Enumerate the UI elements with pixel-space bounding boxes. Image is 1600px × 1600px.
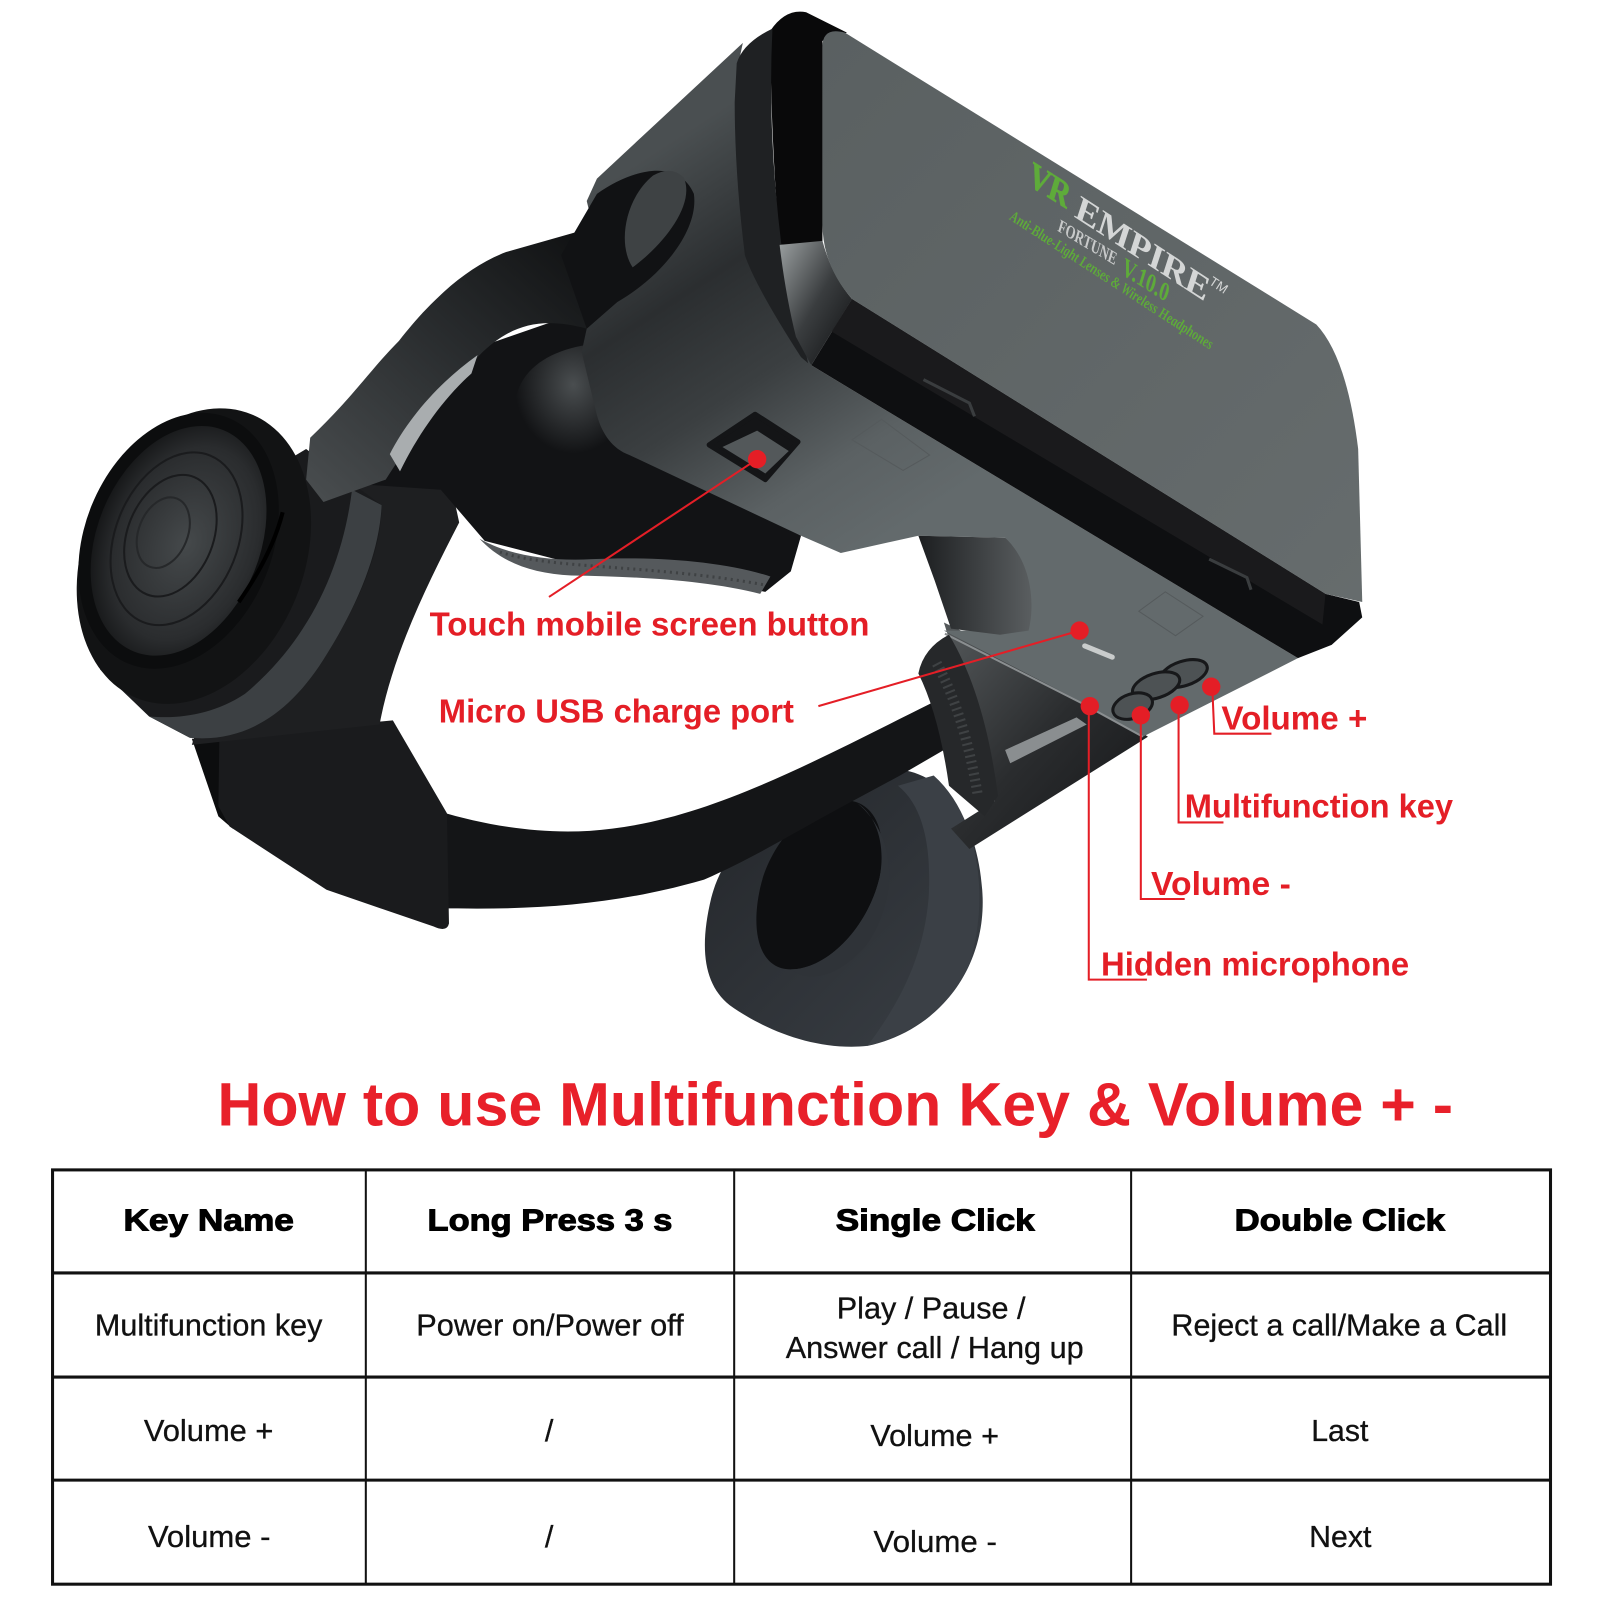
left earcup disc <box>42 383 315 699</box>
row: volume minus: Volume - <box>148 1520 270 1554</box>
callout: multifunction key: Multifunction key <box>1185 788 1453 825</box>
mesh side pad <box>918 635 998 816</box>
back head strap <box>439 702 944 909</box>
inner handle under body <box>918 536 1032 635</box>
table header row: Long Press 3 s <box>428 1204 672 1238</box>
callout: volume plus: Volume + <box>1221 701 1367 738</box>
row: multifunction key: Power on/Power off <box>416 1309 684 1343</box>
foam interior <box>367 301 801 592</box>
row: volume minus: Volume - <box>873 1525 997 1559</box>
row: volume plus: Last <box>1311 1414 1369 1448</box>
brand logo on headset: VR <box>1024 154 1076 217</box>
side buttons <box>1109 654 1211 724</box>
brand logo on headset <box>1007 154 1231 354</box>
strap buckle block <box>218 720 449 929</box>
ear arm clip <box>561 171 694 329</box>
left bezel strip <box>735 29 808 363</box>
row: volume plus: Volume + <box>870 1419 999 1453</box>
row: multifunction key: Multifunction key <box>95 1309 323 1343</box>
title: How to use Multifunction Key & Volume + - <box>217 1071 1453 1139</box>
callout: micro USB charge port: Micro USB charge port <box>439 693 794 730</box>
brand logo on headset: V.10.0 <box>1119 253 1173 308</box>
row: volume plus <box>144 1414 1369 1453</box>
headband arm <box>306 227 617 502</box>
callout: hidden microphone <box>1081 697 1409 984</box>
dark area beneath plate and lower strap <box>944 622 1148 849</box>
callout: hidden microphone: Hidden microphone <box>1101 947 1409 984</box>
side strap under left earcup <box>192 429 459 745</box>
strap buckle left edge <box>192 737 233 829</box>
earcup slot <box>239 512 283 602</box>
callout: touch mobile screen button: Touch mobile screen button <box>430 607 869 644</box>
row: volume minus <box>148 1520 1372 1559</box>
brand logo on headset: Anti-Blue-Light Lenses & Wireless Headphones <box>1007 207 1215 354</box>
callout: volume plus <box>1202 678 1367 738</box>
row: multifunction key: Answer call / Hang up <box>786 1331 1084 1365</box>
callout: multifunction key <box>1170 696 1453 825</box>
callout: touch mobile screen button <box>430 450 869 644</box>
row: volume plus: Volume + <box>144 1414 273 1448</box>
plate lower highlight edge <box>945 634 1143 737</box>
row: volume minus: Next <box>1309 1520 1372 1554</box>
top face plate <box>822 31 1362 602</box>
table header row: Key Name <box>123 1204 294 1238</box>
side body shell <box>582 43 1298 737</box>
left earcup ring <box>34 373 353 739</box>
glossy corner <box>780 241 852 365</box>
left earcup base <box>100 449 382 738</box>
micro USB port <box>1085 646 1112 657</box>
row: multifunction key: Reject a call/Make a Call <box>1171 1309 1507 1343</box>
VR headset illustration <box>34 12 1362 1047</box>
row: multifunction key <box>95 1291 1507 1365</box>
brand logo on headset: TM <box>1207 274 1231 297</box>
row: multifunction key: Play / Pause / <box>837 1291 1026 1325</box>
callout: volume minus: Volume - <box>1151 866 1291 903</box>
black front band <box>811 299 1362 658</box>
dark lip of visor <box>770 12 847 245</box>
key function table <box>52 1169 1551 1584</box>
arm highlight <box>390 355 478 471</box>
bottom earcup <box>705 769 983 1047</box>
table header row <box>123 1204 1446 1238</box>
brand logo on headset: FORTUNE <box>1056 215 1119 269</box>
brand logo on headset: EMPIRE <box>1071 188 1214 310</box>
callout: micro USB charge port <box>439 621 1089 730</box>
row: volume minus: / <box>545 1520 554 1554</box>
foam mesh edge <box>480 539 770 594</box>
table header row: Double Click <box>1235 1204 1446 1238</box>
callout: volume minus <box>1132 706 1291 903</box>
faint panel outlines on underside <box>852 419 1203 636</box>
table header row: Single Click <box>836 1204 1036 1238</box>
lower strap highlight <box>1005 717 1087 763</box>
row: volume plus: / <box>545 1414 554 1448</box>
touch button <box>709 414 798 480</box>
